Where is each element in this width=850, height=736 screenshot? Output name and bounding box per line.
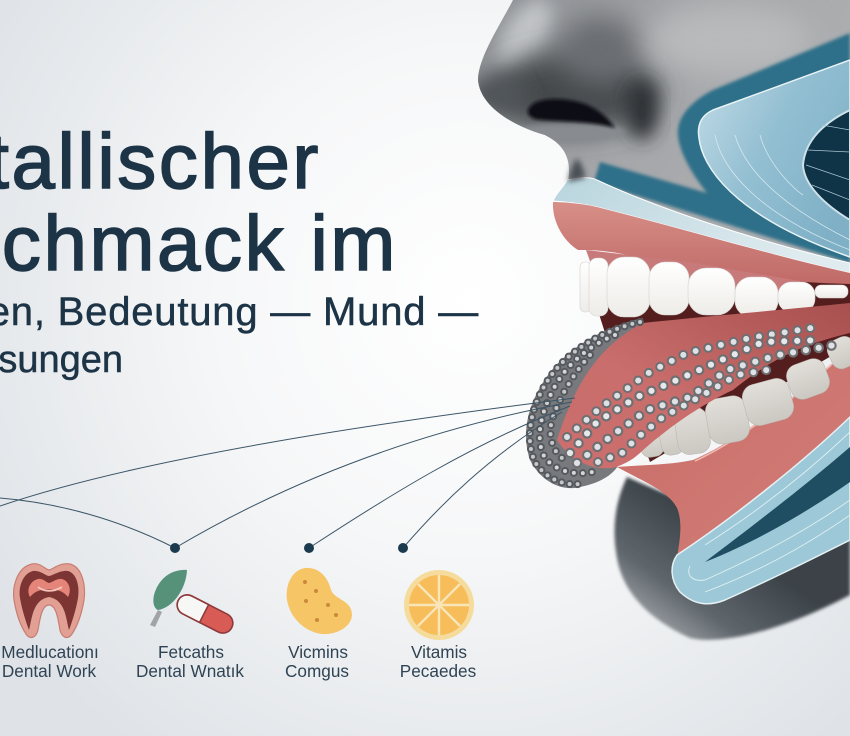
label: cause 1: Dental Work [2,661,97,681]
cause 2: leaf and pill icon [150,570,236,637]
label: cause 4 [400,642,476,681]
bead rows on tongue [567,327,835,463]
blue lower lip layer [672,417,850,604]
light blue cheek layer [698,60,850,257]
label: cause 4: Pecaedes [400,661,476,681]
icon: pill [174,591,236,637]
title [0,117,398,287]
icon: nostril [528,99,615,128]
dark mouth interior [585,270,850,462]
chin [614,477,850,640]
beaded tongue edge mass [526,318,643,488]
label: cause 1: Medlucationı [1,642,99,662]
upper gum [553,202,850,284]
bead rows on edge [530,322,640,484]
subtitle [0,290,479,381]
label: cause 2: Fetcaths [158,642,224,662]
icon: leaf [153,570,187,610]
label: cause 4: Vitamis [411,642,467,662]
teal band around cheek [594,33,850,263]
cause 3: potato-shaped icon [287,568,352,634]
dark inner cheek muscle [803,110,850,220]
gum behind teeth [586,250,800,298]
nose shadow above lip [568,158,585,182]
face illustration: nose and upper face [468,0,850,270]
upper lip layer [553,178,850,273]
label: cause 2: Dental Wnatık [136,661,244,681]
upper teeth [580,257,848,317]
connector lines from tongue to causes [0,398,575,548]
connector dots [170,543,408,553]
label: cause 1 [1,642,99,681]
label: cause 3: Comgus [285,661,349,681]
lip highlight [695,364,832,461]
cause 1: tooth icon [14,564,84,637]
cause 4: citrus slice icon [404,570,474,640]
label: cause 2 [136,642,244,681]
lower teeth [638,333,850,459]
label: cause 3: Vicmins [288,642,348,662]
lower lip [617,345,850,557]
tongue body [557,303,850,468]
label: cause 3 [285,642,349,681]
tongue with metallic beads [526,303,850,488]
